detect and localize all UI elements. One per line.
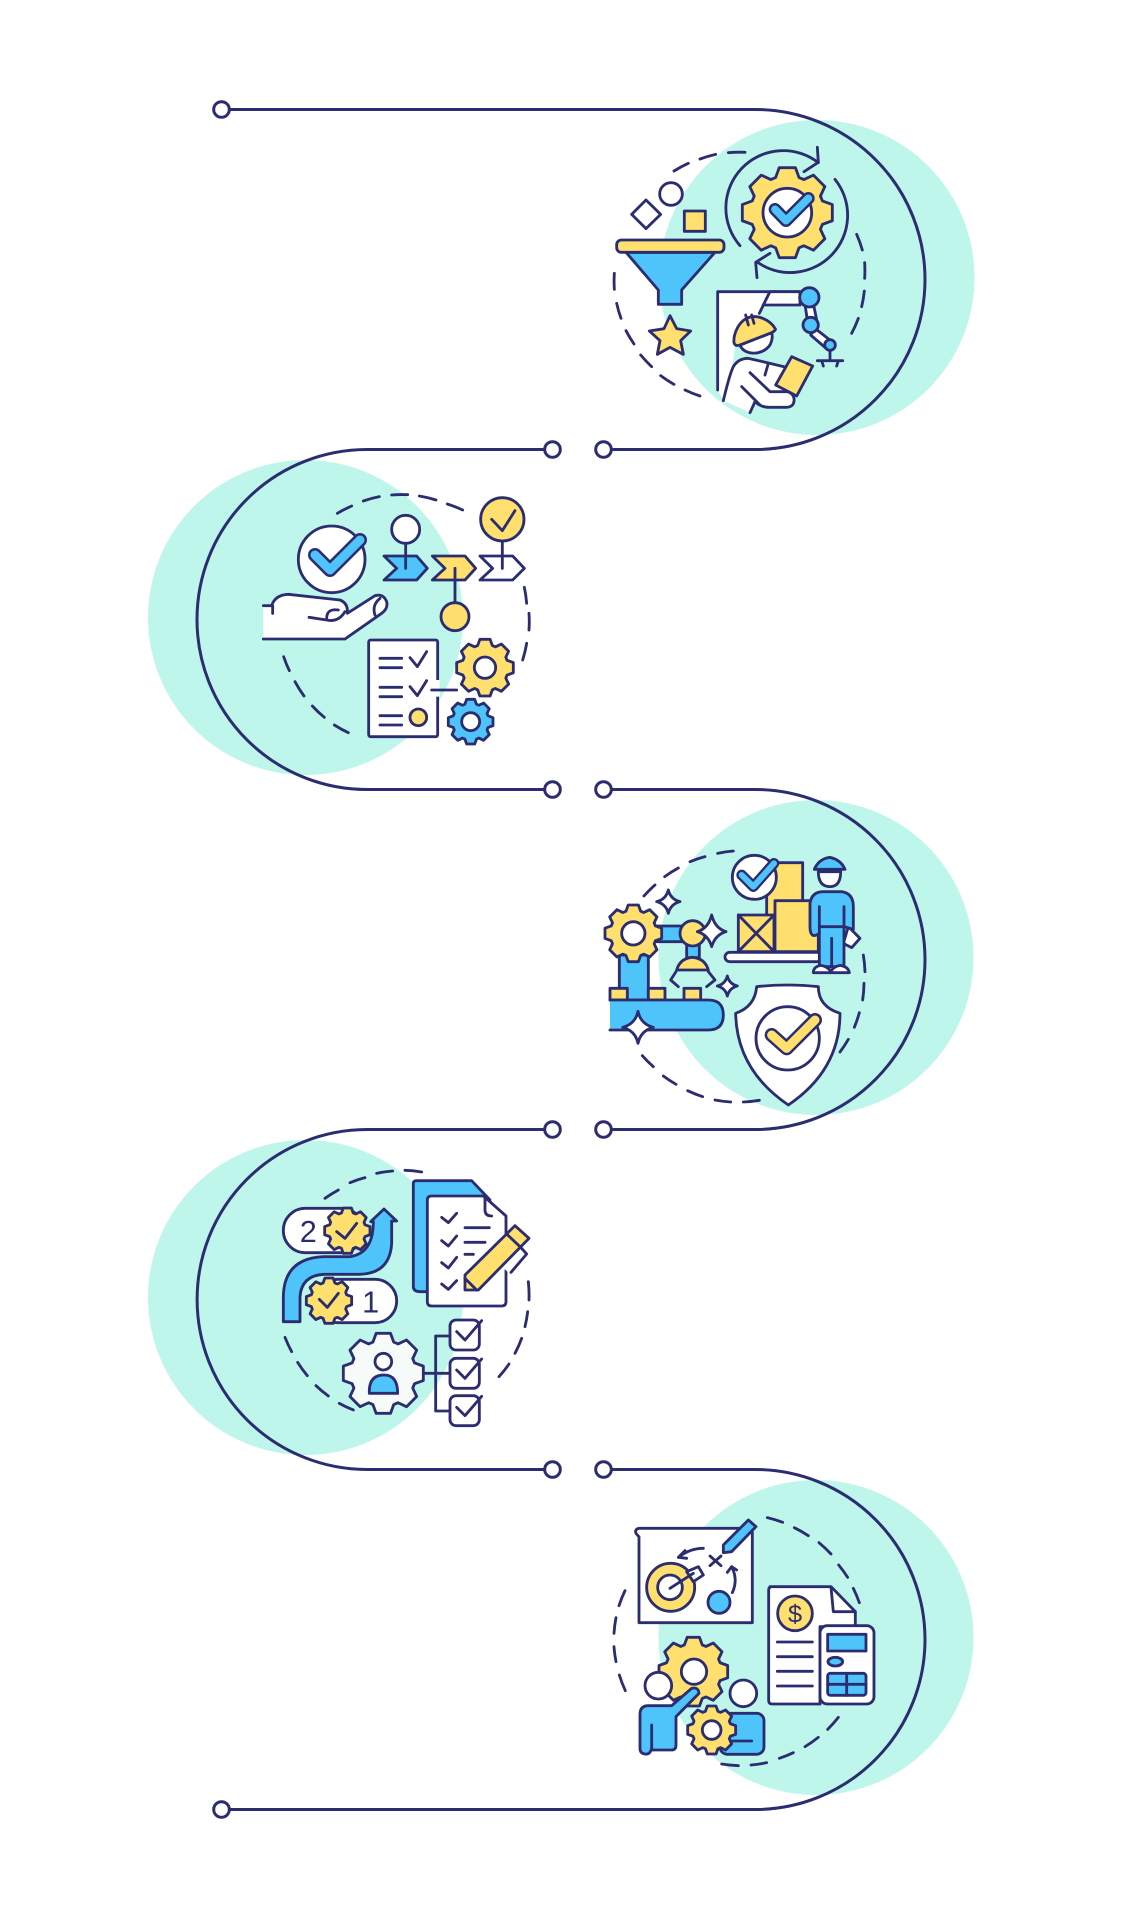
- icon: step 3 robotic production line, boxes, worker and shield: [605, 851, 865, 1105]
- icon: step 4 numbered route, checklist document and staff gear: [283, 1170, 529, 1426]
- icon: step 2 approved workflow, hand and checklist: [263, 495, 529, 744]
- background circles: [148, 120, 974, 1795]
- icon: step 4 numbered route, checklist document and staff gear: 2: [300, 1215, 317, 1249]
- icon: step 1 quality control funnel, gear, robot and worker: [614, 147, 865, 413]
- icon: step 5 strategy board, budget document and team: [614, 1518, 874, 1766]
- icon: step 4 numbered route, checklist document and staff gear: 1: [362, 1285, 379, 1319]
- timeline connector: [197, 102, 925, 1817]
- icon: step 5 strategy board, budget document and team: $: [788, 1600, 802, 1628]
